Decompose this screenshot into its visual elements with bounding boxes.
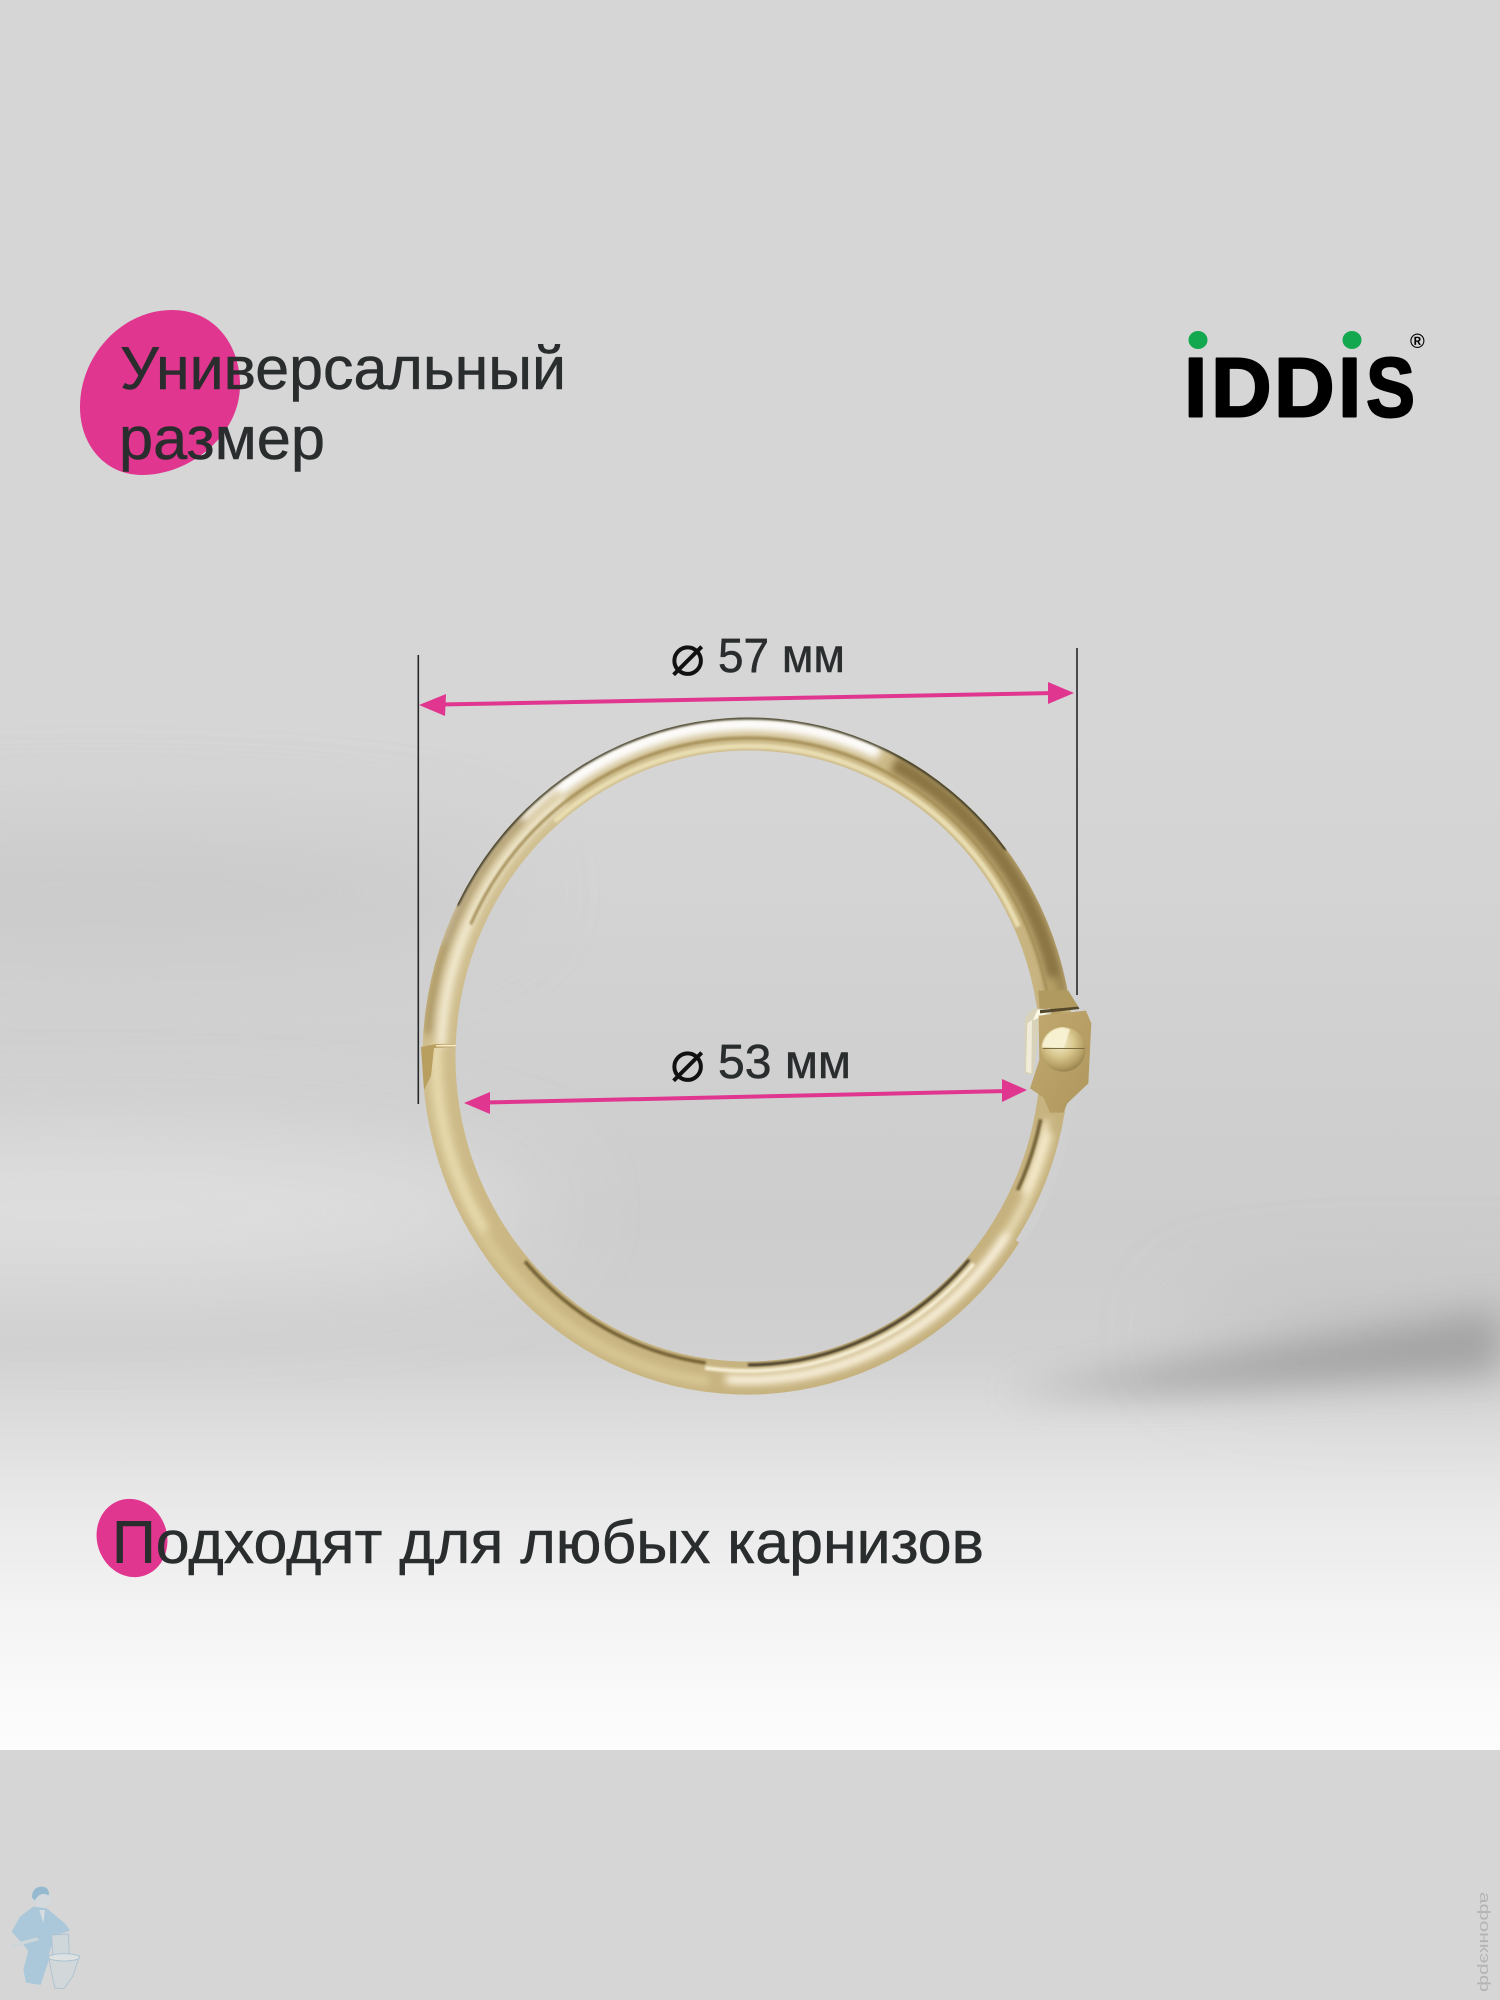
label: 53 mm: 53 мм bbox=[718, 1036, 851, 1089]
arrow: inner diameter 53 mm bbox=[464, 1079, 1027, 1114]
caption: fits any rods bbox=[87, 1490, 984, 1586]
label: 57 mm: 57 мм bbox=[718, 630, 845, 683]
soft wide highlights bbox=[415, 710, 1081, 1402]
heading text: Универсальный bbox=[120, 335, 566, 402]
caption text: Подходят для любых карнизов bbox=[112, 1509, 984, 1576]
clasp dome bbox=[1041, 1027, 1086, 1072]
logo green dots bbox=[1188, 331, 1362, 349]
heading pink blob bbox=[80, 310, 240, 475]
thin edge lines bbox=[456, 717, 1048, 1374]
dimension lines bbox=[418, 648, 1078, 1104]
ring tube bbox=[410, 706, 1086, 1406]
studio background bbox=[0, 852, 1500, 1750]
watermark: vertical text: афонкэрф bbox=[1476, 1892, 1493, 1992]
heading text: размер bbox=[119, 405, 325, 472]
logo registered mark: ® bbox=[1410, 331, 1425, 353]
logo: IDDIS bbox=[1184, 331, 1425, 434]
label: 57 mm: ⌀ bbox=[670, 621, 705, 689]
arrow: outer diameter 57 mm bbox=[419, 682, 1074, 716]
label: 53 mm: ⌀ bbox=[670, 1027, 705, 1095]
gold curtain ring bbox=[410, 706, 1091, 1406]
ring clasp bbox=[1025, 991, 1091, 1113]
caption pink blob bbox=[87, 1490, 177, 1586]
icon: plumber watermark bbox=[12, 1887, 80, 1989]
narrowing of tube at lower right bbox=[410, 706, 1086, 1406]
ring seam bbox=[421, 1044, 456, 1090]
logo wordmark: S bbox=[1366, 340, 1415, 434]
logo wordmark: IDDI bbox=[1184, 340, 1361, 434]
heading: universal size bbox=[80, 310, 566, 475]
footer band bbox=[0, 1750, 1500, 2000]
